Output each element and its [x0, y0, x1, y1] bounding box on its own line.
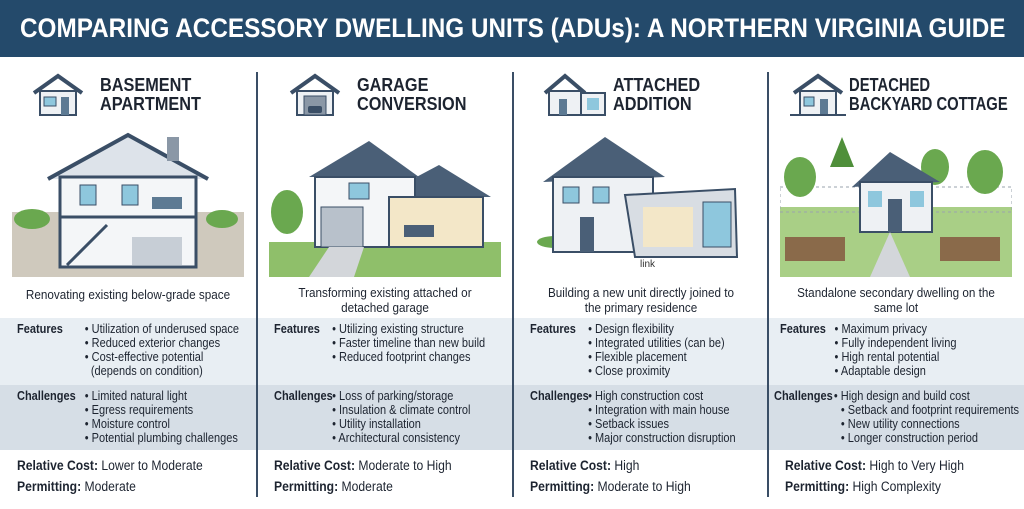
challenges: Integration with main house: [595, 403, 730, 417]
heading: [100, 74, 201, 114]
heading: APARTMENT: [100, 93, 201, 114]
icon: house: [32, 74, 84, 116]
challenges: High construction cost: [595, 389, 703, 403]
challenges: New utility connections: [848, 417, 960, 431]
panel: basement apartment: [12, 74, 244, 494]
icon: addition: [544, 74, 606, 116]
cost and permitting: Permitting: Moderate to High: [530, 479, 691, 494]
challenges: Egress requirements: [92, 403, 193, 417]
features: [530, 322, 725, 378]
heading: BACKYARD COTTAGE: [849, 93, 1008, 114]
caption: same lot: [874, 300, 918, 315]
features: Features: [274, 322, 320, 336]
features: Features: [17, 322, 63, 336]
cost and permitting: Permitting: High Complexity: [785, 479, 941, 494]
features: Utilization of underused space: [92, 322, 239, 336]
icon: cottage: [790, 74, 846, 116]
challenges: Challenges: [17, 389, 76, 403]
challenges: Moisture control: [92, 417, 170, 431]
challenges: Challenges: [530, 389, 589, 403]
features: Design flexibility: [595, 322, 674, 336]
features: Maximum privacy: [841, 322, 927, 336]
challenges: High design and build cost: [841, 389, 970, 403]
illustration: addition: link: [640, 259, 656, 270]
challenges: Limited natural light: [92, 389, 187, 403]
heading: ADDITION: [613, 93, 692, 114]
title: [0, 0, 1024, 57]
caption: [298, 285, 472, 315]
features: [274, 322, 485, 364]
features: Flexible placement: [595, 350, 687, 364]
features: (depends on condition): [91, 364, 203, 378]
features: Features: [530, 322, 576, 336]
cost and permitting: Relative Cost: High: [530, 458, 639, 473]
cost and permitting: Relative Cost: Lower to Moderate: [17, 458, 203, 473]
cost and permitting: [530, 458, 691, 494]
cost and permitting: [785, 458, 964, 494]
heading: BASEMENT: [100, 74, 191, 95]
challenges: [17, 389, 238, 445]
challenges: Utility installation: [339, 417, 421, 431]
heading: [613, 74, 700, 114]
illustration: garage house: [269, 141, 501, 277]
heading: CONVERSION: [357, 93, 466, 114]
heading: ATTACHED: [613, 74, 700, 95]
challenges: [774, 389, 1019, 445]
caption: detached garage: [341, 300, 429, 315]
features: [780, 322, 956, 378]
features: Features: [780, 322, 826, 336]
cost and permitting: [17, 458, 203, 494]
features: Integrated utilities (can be): [595, 336, 725, 350]
heading: [357, 74, 466, 114]
cost and permitting: Permitting: Moderate: [274, 479, 393, 494]
challenges: Setback and footprint requirements: [848, 403, 1019, 417]
cost and permitting: [274, 458, 452, 494]
features: Close proximity: [595, 364, 670, 378]
cost and permitting: Permitting: Moderate: [17, 479, 136, 494]
challenges: Major construction disruption: [595, 431, 736, 445]
illustration: basement cross-section: [12, 132, 244, 277]
features: Reduced footprint changes: [339, 350, 470, 364]
challenges: Challenges: [774, 389, 833, 403]
challenges: [274, 389, 470, 445]
icon: garage: [290, 74, 340, 116]
cost and permitting: Relative Cost: Moderate to High: [274, 458, 452, 473]
caption: Standalone secondary dwelling on the: [797, 285, 995, 300]
features: Faster timeline than new build: [339, 336, 485, 350]
challenges: Architectural consistency: [338, 431, 460, 445]
panel: attached addition: [530, 74, 738, 494]
features: Adaptable design: [841, 364, 926, 378]
caption: [548, 285, 734, 315]
title: COMPARING ACCESSORY DWELLING UNITS (ADUs): A NORTHERN VIRGINIA GUIDE: [20, 13, 1006, 43]
caption: the primary residence: [585, 300, 697, 315]
challenges: Loss of parking/storage: [339, 389, 453, 403]
features: Utilizing existing structure: [339, 322, 464, 336]
challenges: Insulation & climate control: [339, 403, 470, 417]
caption: Building a new unit directly joined to: [548, 285, 734, 300]
panel: detached backyard cottage: [774, 74, 1019, 494]
panel: garage conversion: [269, 74, 501, 494]
features: Reduced exterior changes: [92, 336, 220, 350]
illustration: addition: [537, 137, 738, 270]
illustration: cottage garden: [780, 137, 1012, 277]
heading: DETACHED: [849, 74, 930, 95]
caption: [797, 285, 995, 315]
features: Fully independent living: [841, 336, 956, 350]
challenges: Setback issues: [595, 417, 669, 431]
features: [17, 322, 239, 378]
caption: Renovating existing below-grade space: [26, 287, 230, 302]
caption: Transforming existing attached or: [298, 285, 472, 300]
challenges: Longer construction period: [848, 431, 978, 445]
features: High rental potential: [841, 350, 939, 364]
challenges: Potential plumbing challenges: [92, 431, 238, 445]
heading: GARAGE: [357, 74, 428, 95]
heading: [849, 74, 1008, 114]
features: Cost-effective potential: [92, 350, 203, 364]
challenges: [530, 389, 736, 445]
cost and permitting: Relative Cost: High to Very High: [785, 458, 964, 473]
challenges: Challenges: [274, 389, 333, 403]
